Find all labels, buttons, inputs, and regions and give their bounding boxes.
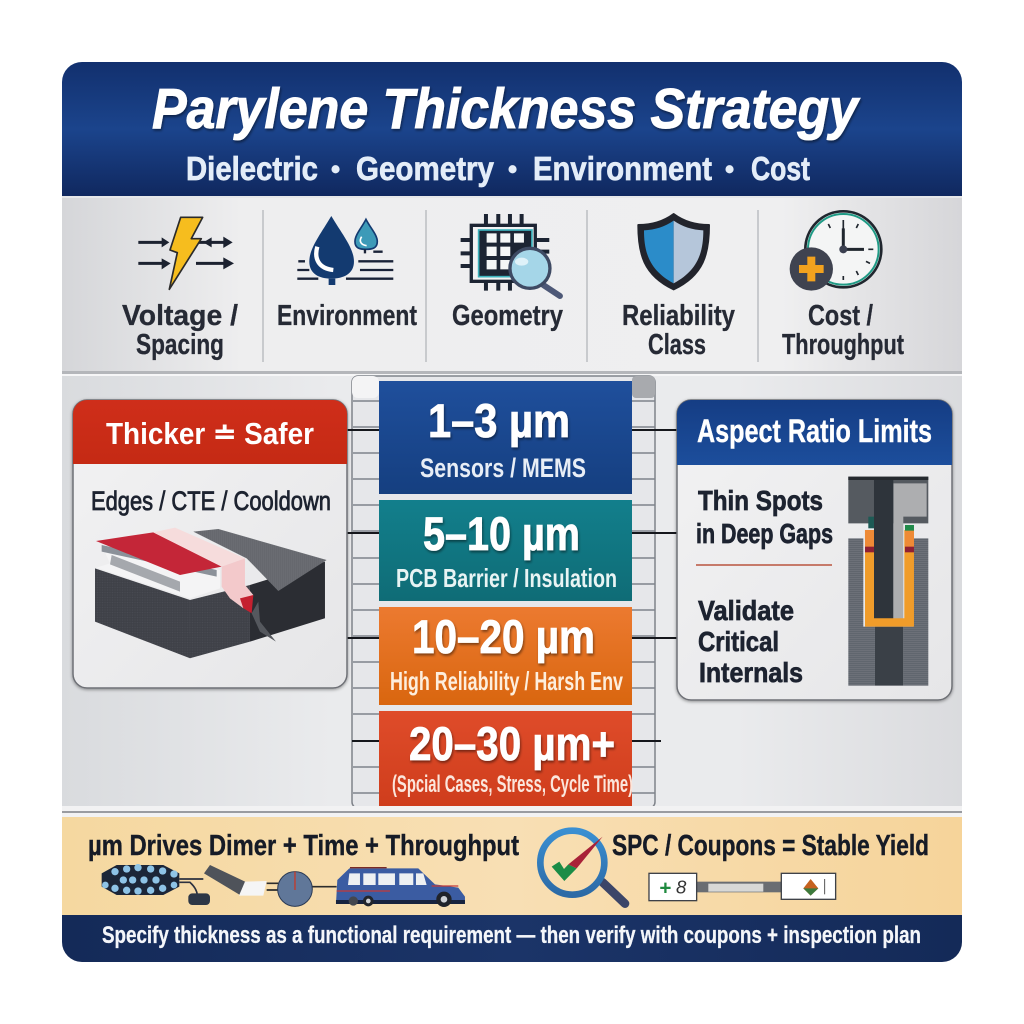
panel: thickness 5-10 um — [379, 500, 632, 601]
label: voltage spacing: Spacing — [136, 329, 224, 361]
label: cost throughput: Throughput — [782, 329, 904, 361]
panel: thickness 1-3 um — [379, 381, 632, 494]
panel: thickness 20-30 um: 20–30 µm+ — [409, 717, 615, 770]
label: reliability class: Reliability — [622, 300, 735, 332]
subtitle: • — [725, 154, 734, 184]
panel: thickness 10-20 um: High Reliability / Harsh Env — [390, 666, 623, 696]
subtitle — [188, 156, 810, 188]
illustration: coupon strip: + — [659, 876, 671, 899]
label: voltage spacing: Voltage / — [122, 300, 238, 332]
panel: thickness 10-20 um — [379, 607, 632, 705]
header banner — [62, 62, 962, 196]
icon: geometry chip with magnifier — [461, 214, 560, 296]
label: cost throughput: Cost / — [808, 300, 873, 332]
text: validate critical internals: Validate — [698, 595, 794, 626]
label: voltage spacing — [122, 300, 238, 361]
subtitle: • — [331, 154, 340, 184]
panel text: Edges / CTE / Cooldown — [91, 486, 331, 516]
panel heading: Aspect Ratio Limits — [697, 413, 932, 449]
label: reliability class — [623, 304, 735, 354]
icon: cost clock with plus — [790, 211, 881, 291]
subtitle: Geometry — [356, 150, 495, 187]
background card — [62, 62, 962, 962]
illustration: coupon strip: 8 — [676, 877, 687, 898]
ruler behind thickness stack — [352, 376, 655, 808]
label: environment: Environment — [277, 300, 417, 332]
text: thin spots: Thin Spots — [698, 485, 823, 516]
label: reliability class: Class — [648, 329, 706, 361]
icon: environment water drops — [297, 216, 393, 285]
panel: thickness 20-30 um — [379, 711, 633, 806]
illustration: coupon strip — [649, 873, 836, 901]
panel: thickness 20-30 um: (Spcial Cases, Stress, Cycle Time) — [392, 771, 633, 798]
panel heading: Thicker ≐ Safer — [106, 416, 314, 451]
panel: thickness 5-10 um: 5–10 µm — [423, 507, 580, 560]
text: spc coupons: SPC / Coupons = Stable Yield — [612, 830, 929, 862]
icon: voltage spacing — [138, 217, 234, 289]
illustration: cracked coating block — [95, 528, 327, 658]
panel: thickness 1-3 um: Sensors / MEMS — [420, 453, 586, 483]
icon: magnifier with check — [540, 831, 625, 904]
text: validate critical internals — [698, 600, 802, 683]
panel: thickness 1-3 um: 1–3 µm — [428, 394, 570, 447]
text: thin spots: in Deep Gaps — [696, 518, 833, 549]
connector lines — [347, 430, 678, 741]
title: Parylene Thickness Strategy — [152, 77, 861, 141]
panel: aspect ratio limits — [677, 400, 952, 700]
subtitle: Dielectric — [186, 150, 318, 187]
middle zone background — [62, 374, 962, 810]
text: validate critical internals: Critical — [698, 626, 779, 657]
icon: reliability shield — [638, 214, 709, 289]
footer banner — [62, 915, 962, 962]
bottom summary band — [62, 806, 962, 915]
illustration: deep gap cross section — [848, 477, 928, 686]
factor icon band — [62, 198, 962, 376]
text: drives: µm Drives Dimer + Time + Throughput — [88, 830, 519, 862]
panel: thickness 5-10 um: PCB Barrier / Insulation — [396, 563, 617, 593]
label: geometry: Geometry — [452, 300, 563, 332]
label: cost throughput — [782, 300, 904, 361]
panel: thickness 10-20 um: 10–20 µm — [412, 610, 595, 663]
subtitle: Cost — [751, 150, 810, 187]
illustration: deposition chain and van — [102, 864, 465, 907]
subtitle: Environment — [533, 150, 712, 187]
text: thin spots — [696, 485, 833, 549]
subtitle: • — [508, 154, 517, 184]
panel: thicker is not safer — [73, 400, 347, 688]
text: validate critical internals: Internals — [699, 657, 803, 688]
